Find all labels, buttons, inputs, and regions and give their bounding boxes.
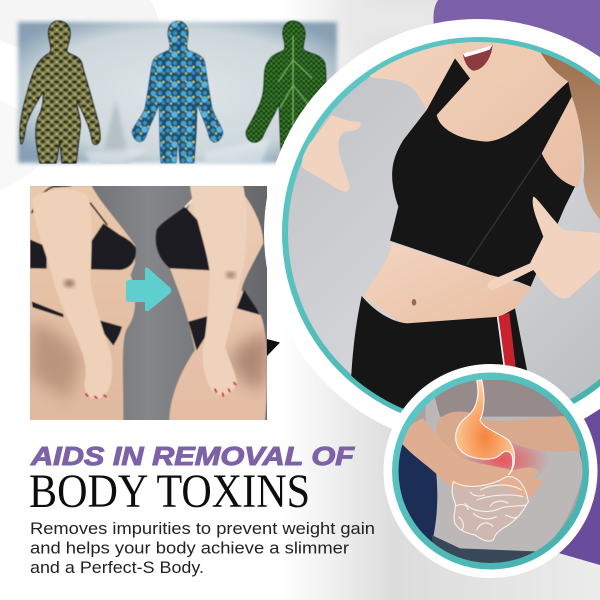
forearm top bbox=[436, 412, 580, 457]
raised arm and chest skin bbox=[370, 42, 582, 188]
body text: and helps your body achieve a slimmer bbox=[30, 540, 350, 558]
trousers bbox=[432, 535, 536, 563]
intestines bbox=[452, 477, 528, 541]
panel: three body silhouettes photo bbox=[18, 21, 337, 163]
grey t-shirt bbox=[426, 398, 582, 552]
before body bbox=[27, 186, 136, 423]
pink glow bbox=[463, 442, 546, 483]
heading: aids in removal of: AIDS IN REMOVAL OF bbox=[30, 443, 356, 471]
arrow: before to after bbox=[126, 268, 171, 311]
purple shape: top right bbox=[433, 0, 600, 70]
icon: green vessel body bbox=[246, 21, 326, 163]
icon: black triangle fragment bbox=[267, 339, 280, 356]
stomach bbox=[456, 380, 515, 475]
black pants bbox=[350, 296, 540, 423]
grey backdrop bbox=[513, 377, 593, 460]
hair bbox=[540, 52, 600, 220]
midriff skin bbox=[363, 243, 531, 325]
body text: Removes impurities to prevent weight gain bbox=[30, 520, 375, 538]
purple shape: lower right bbox=[520, 405, 600, 565]
icon: olive toxin body bbox=[20, 21, 100, 163]
face and mouth bbox=[452, 44, 493, 71]
body text: and a Perfect-S Body. bbox=[30, 559, 204, 577]
forearm and lower hand bbox=[402, 418, 543, 497]
upper shirt tone bbox=[430, 380, 568, 417]
after body bbox=[156, 186, 269, 423]
icon: blue cell body bbox=[132, 21, 223, 163]
red side stripe bbox=[498, 313, 516, 367]
panel: before and after photo bbox=[27, 186, 269, 423]
left pointing hand bbox=[302, 115, 361, 192]
black crop top bbox=[390, 58, 575, 287]
panel: small digestive photo ring bbox=[384, 364, 598, 578]
right pointing hand bbox=[487, 197, 600, 298]
navel bbox=[412, 299, 416, 306]
navy backdrop bbox=[398, 444, 438, 542]
panel: main photo ring bbox=[264, 19, 600, 447]
heading: body toxins: BODY TOXINS bbox=[29, 465, 310, 518]
